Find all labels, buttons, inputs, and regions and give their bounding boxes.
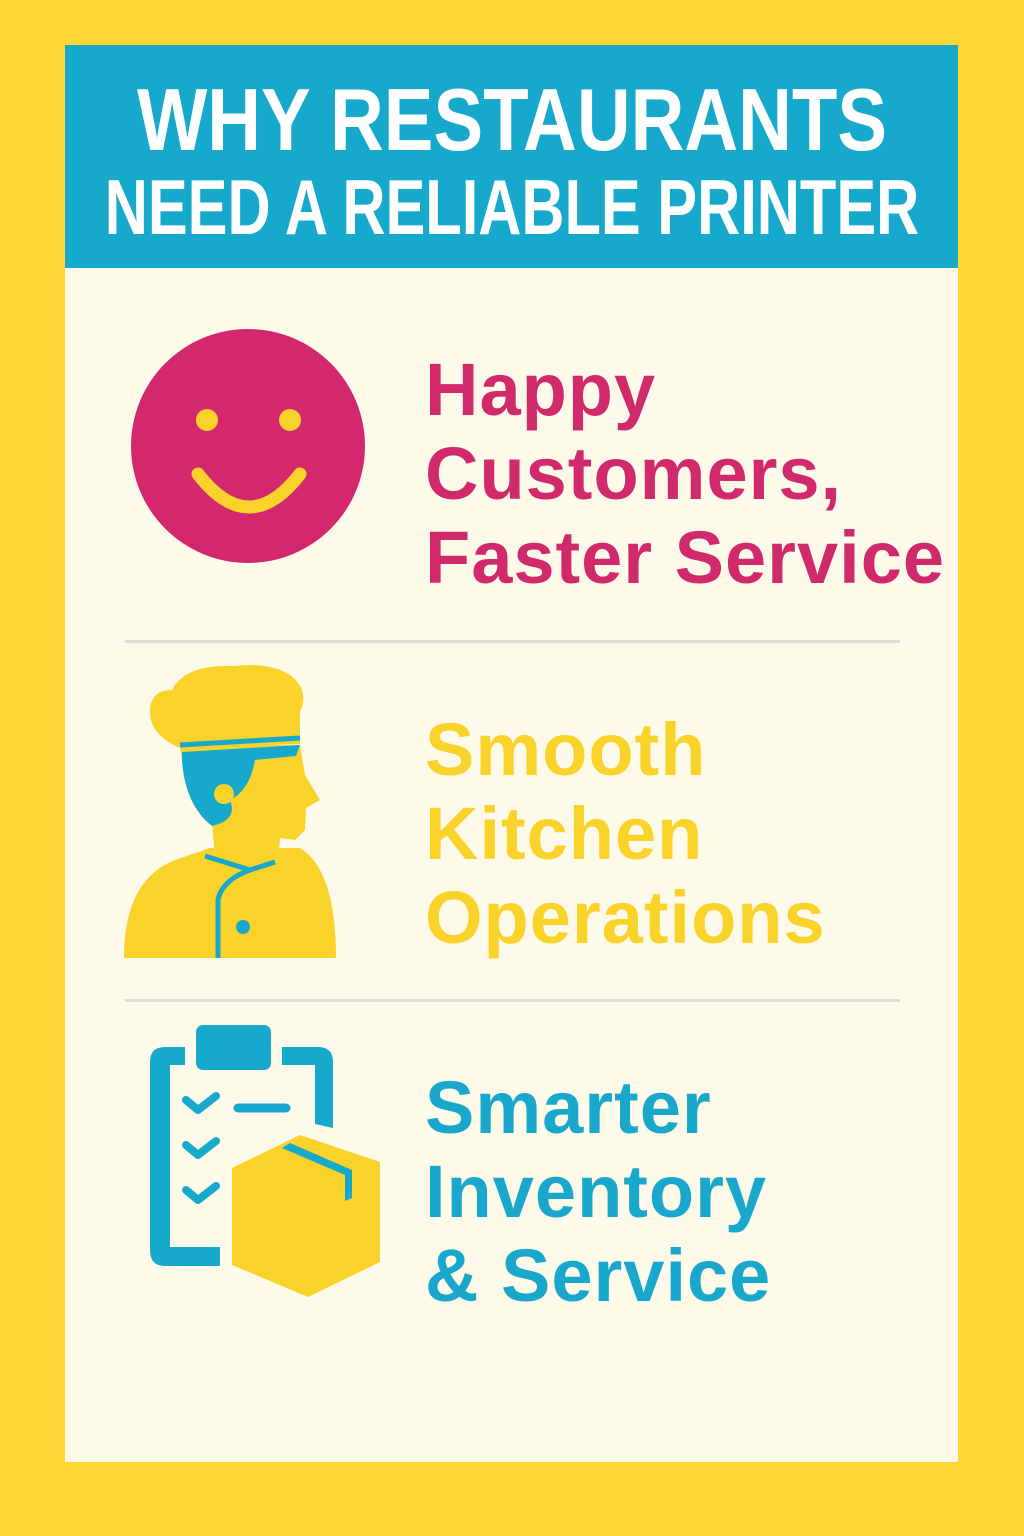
heading: happy customers <box>425 348 945 599</box>
heading: smarter inventory: & Service <box>425 1234 771 1317</box>
heading: happy customers: Faster Service <box>425 516 945 599</box>
heading: smarter inventory: Smarter <box>425 1066 712 1149</box>
heading: smooth kitchen operations: Operations <box>425 876 826 959</box>
title line 1: WHY RESTAURANTS <box>136 70 887 169</box>
heading: happy customers: Happy <box>425 348 656 431</box>
heading: happy customers: Customers, <box>425 432 842 515</box>
header band <box>65 45 958 268</box>
heading: smarter inventory: Inventory <box>425 1150 767 1233</box>
heading: smooth kitchen operations: Kitchen <box>425 792 703 875</box>
heading: smooth kitchen operations: Smooth <box>425 708 706 791</box>
title line 2: NEED A RELIABLE PRINTER <box>104 163 919 251</box>
heading: smooth kitchen operations <box>425 708 826 959</box>
heading: smarter inventory <box>425 1066 771 1317</box>
